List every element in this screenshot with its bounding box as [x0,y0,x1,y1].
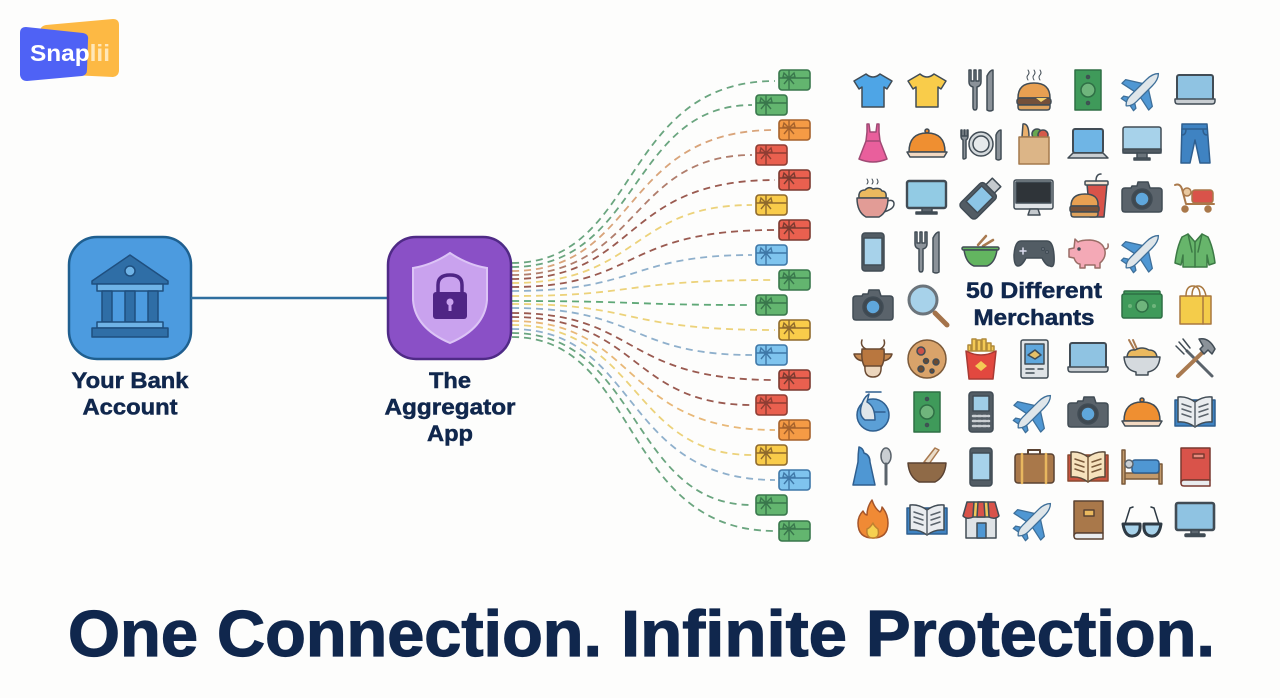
icon: cow [854,340,892,377]
icon: magazine [1021,340,1048,378]
gift cards column [756,70,810,541]
panel: your bank account icon [69,237,191,359]
label: The Aggregator App [384,368,516,446]
icon: open book [1068,452,1108,482]
icon: globe figure [857,392,889,431]
logo: Snaplii: Snaplii [30,40,110,66]
title: Infinite [621,597,847,670]
icon: bed [1122,450,1162,484]
icon: jeans [1181,124,1210,163]
icon: game controller [1014,241,1054,267]
icon: blue t-shirt [854,74,892,107]
flow lines: app to gift cards [512,81,775,531]
icon: laptop [1068,343,1108,372]
icon: suitcase [1015,450,1054,483]
icon: flame [858,500,888,538]
icon: dark monitor [1014,180,1053,215]
icon: plane [1113,60,1172,119]
icon: banknote [1075,70,1101,110]
label: The Aggregator App: App [427,421,473,446]
merchant icon grid [853,60,1215,549]
icon: grocery bag [1019,124,1049,164]
icon: smartphone [970,448,992,486]
icon: mortar bowl [908,448,946,482]
icon: fork and knife [915,232,939,273]
label: Your Bank Account [72,368,189,420]
icon: calculator phone [969,392,993,432]
label: The Aggregator App: The [429,368,471,393]
icon: food cloche [907,129,947,157]
connector: bank to app [191,297,388,299]
icon: laptop [1175,75,1215,104]
icon: usb device [958,175,1004,221]
icon: coffee cup [857,179,894,217]
icon: laptop [1068,129,1108,158]
icon: place setting [961,130,1001,160]
label: Your Bank Account: Your Bank [72,368,189,393]
icon: red book [1181,448,1210,486]
icon: television [907,181,946,214]
icon: storefront [963,502,999,538]
icon: camera [853,290,893,320]
title: Protection. [866,597,1215,670]
icon: cookie [908,340,946,378]
icon: open book [1175,397,1215,427]
heading: 50 Different Merchants [966,278,1103,330]
heading: 50 Different Merchants: Merchants [974,305,1094,330]
icon: burger and drink [1070,174,1108,217]
icon: camera [1122,182,1162,212]
icon: monitor [1176,503,1214,536]
title: Connection. [217,597,602,670]
label: The Aggregator App: Aggregator [384,394,516,420]
icon: bell and spoon [853,447,891,485]
icon: desktop monitor [1123,127,1161,160]
title: One [68,597,198,670]
heading: 50 Different Merchants: 50 Different [966,278,1103,303]
label: Your Bank Account: Account [82,394,178,420]
icon: yellow t-shirt [908,74,946,107]
icon: banknote [914,392,940,432]
icon: food cloche [1122,398,1162,426]
icon: shopping bag [1180,286,1211,324]
panel: aggregator app icon [388,237,511,359]
icon: fork and hammer [1176,339,1215,376]
icon: green bowl [962,236,999,266]
icon: plane [1005,490,1064,549]
icon: fries [966,339,996,379]
icon: bank building [92,255,168,337]
icon: burger [1017,70,1051,110]
icon: stack of cash [1122,291,1162,318]
icon: open book [907,505,947,535]
icon: green jacket [1175,234,1215,267]
icon: magnifying glass [909,286,947,325]
icon: glasses [1123,507,1161,536]
icon: camera [1068,397,1108,427]
icon: pink dress [859,124,887,162]
icon: shield with padlock [413,253,487,343]
logo: Snaplii [20,19,119,81]
title [68,597,1215,670]
icon: smartphone [862,233,884,271]
icon: plane [1005,382,1064,441]
icon: luggage cart [1175,184,1214,212]
icon: brown book [1074,501,1103,539]
icon: fork and knife [969,70,993,111]
icon: plane [1113,222,1172,281]
icon: noodle bowl [1124,340,1160,375]
icon: piggy bank [1069,239,1108,268]
